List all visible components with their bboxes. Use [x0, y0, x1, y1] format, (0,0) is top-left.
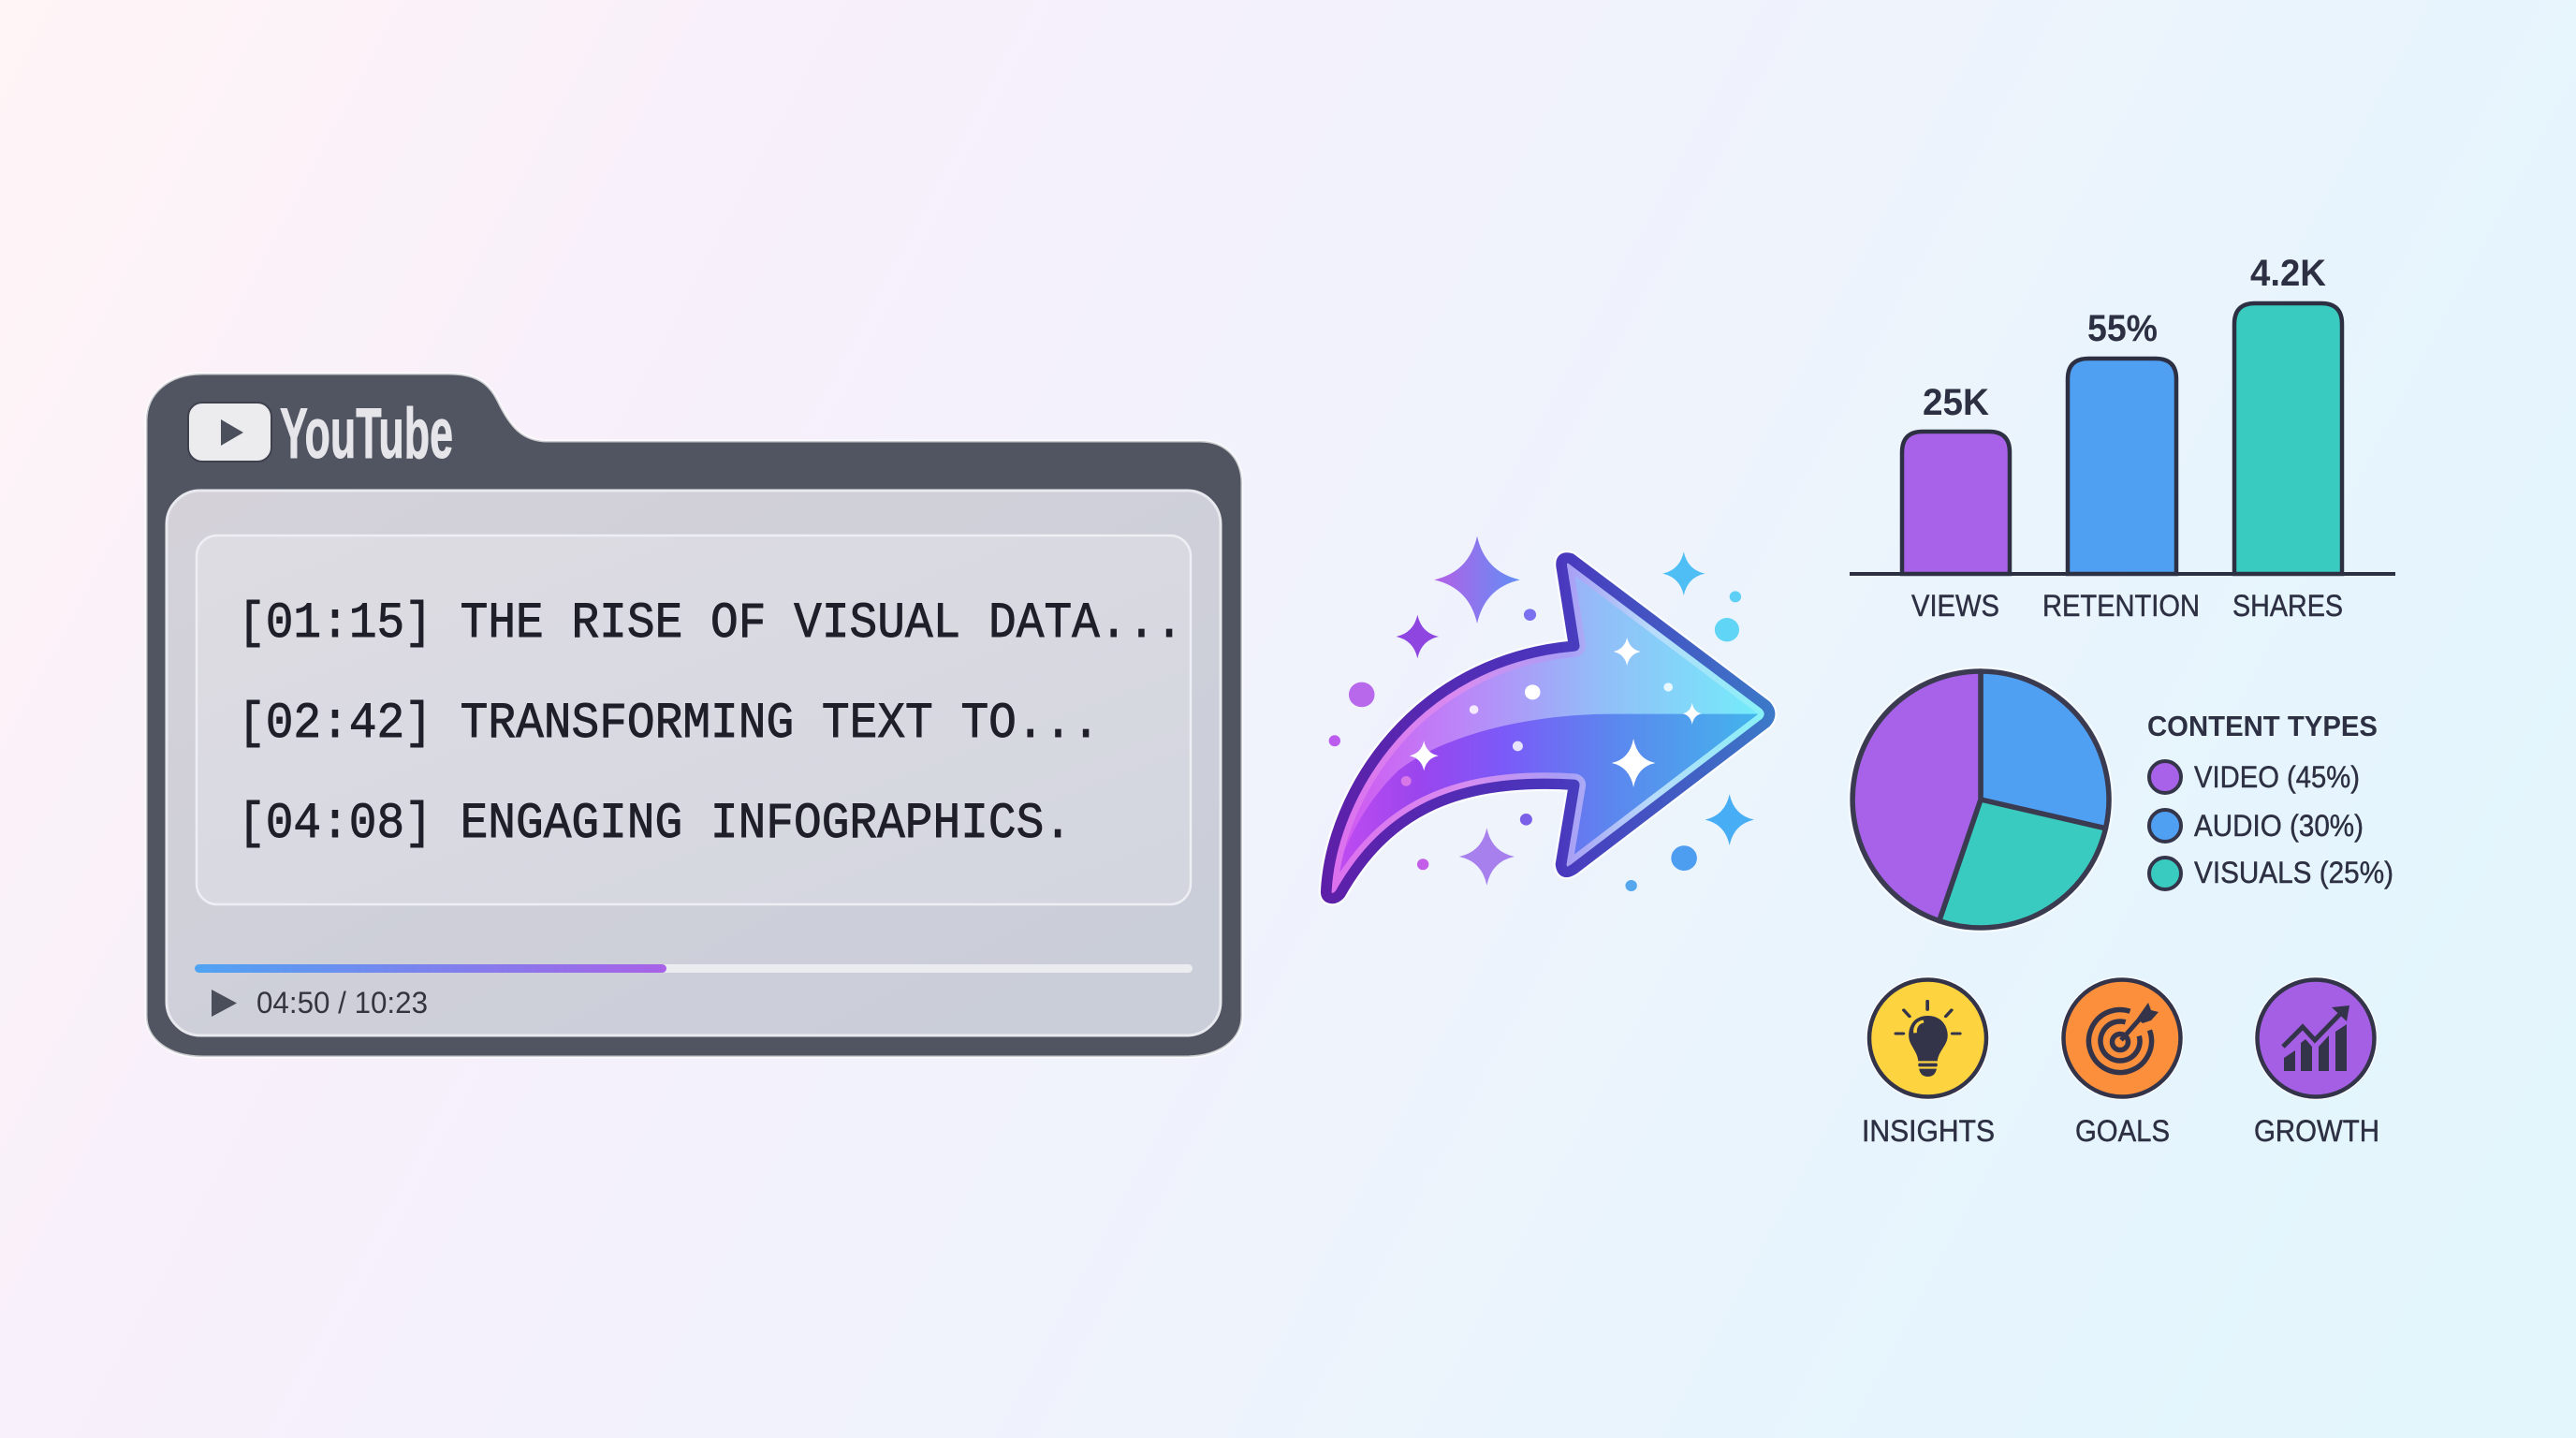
legend title: CONTENT TYPES [2147, 710, 2378, 742]
chart axis [1850, 572, 2395, 576]
bar: retention: RETENTION [2042, 589, 2200, 623]
dots [1329, 591, 1741, 891]
transcript line 2: [02:42] TRANSFORMING TEXT TO... [238, 696, 1100, 753]
transcript box [197, 536, 1191, 904]
YouTube logo: YouTube [280, 394, 453, 474]
legend item: audio: AUDIO (30%) [2194, 809, 2364, 843]
bar: shares: SHARES [2232, 589, 2343, 623]
bar chart [1850, 253, 2395, 623]
transcript line 1: [01:15] THE RISE OF VISUAL DATA... [238, 595, 1183, 653]
lightbulb [1895, 1001, 1960, 1077]
folder frame [146, 374, 1242, 1057]
target [2080, 1001, 2160, 1081]
transcript line 3: [04:08] ENGAGING INFOGRAPHICS. [238, 796, 1072, 853]
growth chart [2283, 1005, 2349, 1071]
label: insights: INSIGHTS [1862, 1114, 1995, 1148]
icon: play button [212, 990, 237, 1017]
bar: views: VIEWS [1911, 589, 1999, 623]
sparkles outside arrow [1397, 536, 1754, 886]
icon: insights [1862, 976, 1995, 1148]
inner panel [167, 491, 1221, 1035]
pie chart [1848, 667, 2114, 932]
legend: content types [2147, 710, 2393, 889]
label: goals: GOALS [2075, 1114, 2170, 1148]
bar: retention [2042, 308, 2200, 623]
panel: YouTube transcript window [146, 374, 1242, 1057]
icon: goals [2060, 976, 2184, 1148]
progress bar [195, 964, 1193, 973]
legend item: video: VIDEO (45%) [2194, 760, 2360, 794]
arrow: transformation with sparkles [1326, 536, 1770, 899]
bar: shares [2232, 253, 2343, 623]
bar: retention: 55% [2087, 308, 2158, 349]
YouTube logo [188, 394, 453, 474]
label: growth: GROWTH [2254, 1114, 2379, 1148]
sparkles inside arrow [1410, 638, 1702, 787]
legend item: visuals: VISUALS (25%) [2194, 856, 2393, 889]
arrow body [1326, 558, 1770, 899]
time label: 04:50 / 10:23 [256, 986, 428, 1020]
icon: growth [2254, 976, 2379, 1148]
bar: views: 25K [1923, 382, 1989, 423]
bar: shares: 4.2K [2250, 253, 2326, 294]
bar: views [1902, 382, 2010, 623]
